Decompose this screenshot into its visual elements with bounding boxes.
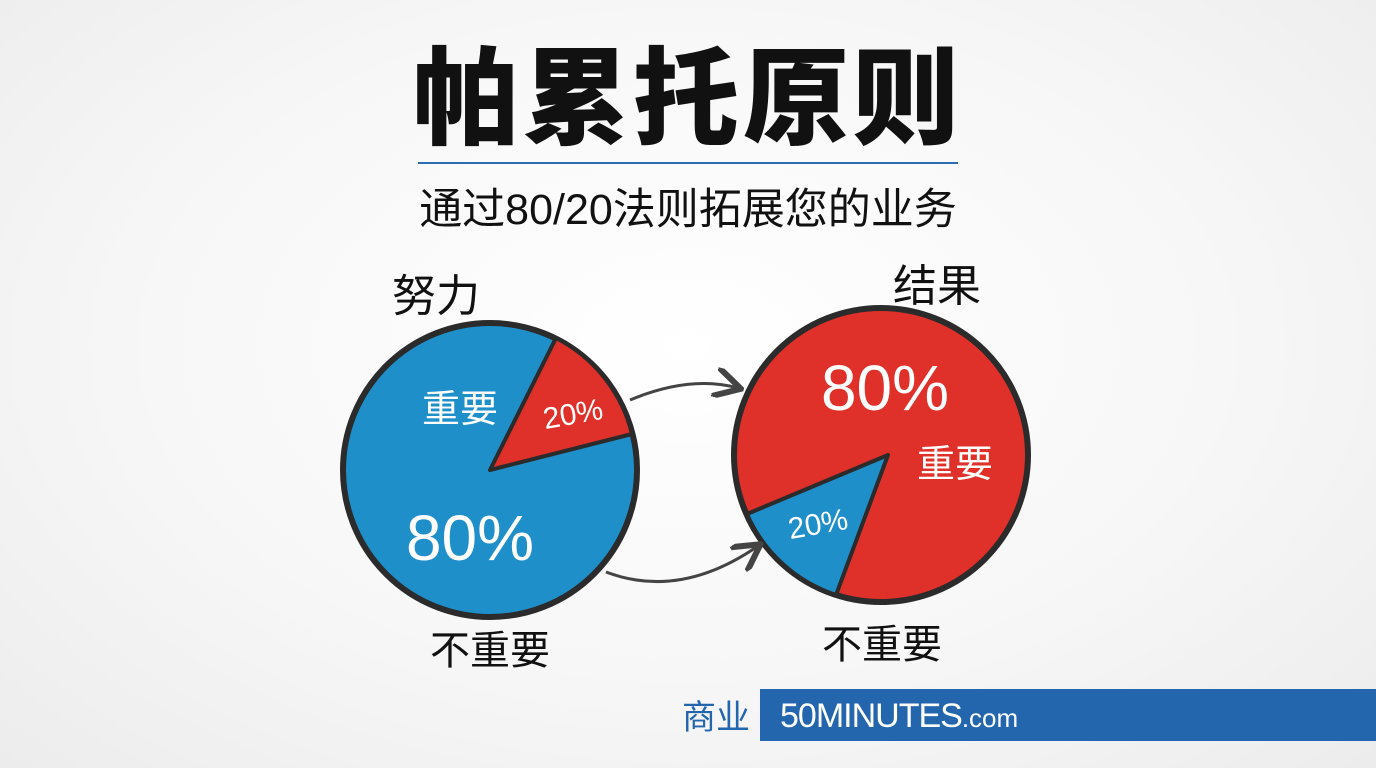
right pie: results: 重要 <box>917 444 993 486</box>
title: 帕累托原则 <box>413 41 963 159</box>
arrow: top <box>630 384 738 400</box>
arrow: bottom <box>606 546 758 582</box>
left pie: effort <box>343 323 637 617</box>
right pie: results: 20% <box>786 503 851 546</box>
label: results: 结果 <box>893 262 981 311</box>
brand text: 50MINUTES.com <box>780 697 1018 735</box>
footer: brand bar <box>760 689 1376 741</box>
left pie: effort: 80% <box>406 502 534 574</box>
red 20% wedge <box>490 338 632 470</box>
blue 20% wedge <box>747 455 888 595</box>
subtitle: 通过80/20法则拓展您的业务 <box>419 186 957 234</box>
label: right unimportant: 不重要 <box>822 623 942 667</box>
title underline <box>418 162 958 164</box>
right pie: results: 80% <box>821 352 949 424</box>
label: left unimportant: 不重要 <box>430 629 550 673</box>
label: effort: 努力 <box>392 272 480 321</box>
footer: business label: 商业 <box>682 699 750 737</box>
left pie: effort: 重要 <box>422 389 498 431</box>
right pie: results <box>734 308 1028 602</box>
left pie: effort: 20% <box>541 393 606 436</box>
